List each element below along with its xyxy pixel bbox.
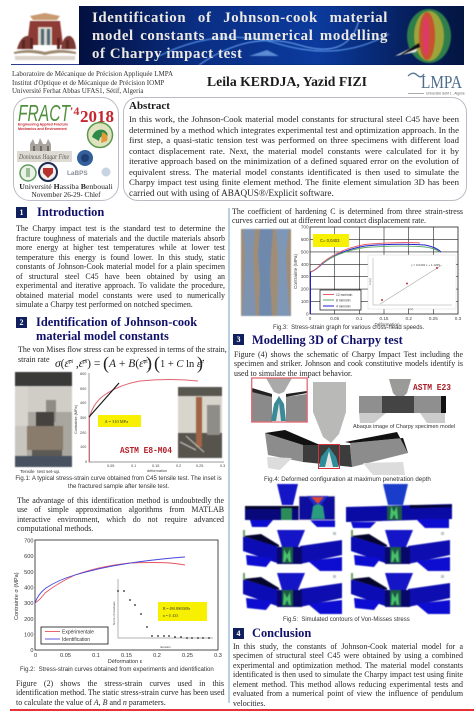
chart: strain rate curves: 0.15 — [380, 316, 389, 321]
photo label: Tensile test set-up. — [20, 469, 60, 474]
chart: strain rate curves: 100 — [301, 299, 309, 304]
chart: tensile stress-strain curve: 400 — [80, 401, 86, 405]
abstract text: In this work, the Johnson-Cook material model constants for structural steel C45 have been — [129, 114, 459, 124]
chart: experimental vs identification curves: 500 — [24, 570, 34, 576]
deformed right beam — [350, 438, 408, 467]
conference logo artwork: '4 — [70, 104, 79, 118]
chart: strain rate curves: 600 — [301, 237, 309, 242]
photo: fractured sample — [177, 386, 223, 459]
flow stress text — [18, 345, 227, 364]
figure: Charpy specimen model and deformed configuration — [251, 377, 455, 475]
figure 2 text: to calculate the value of A, B and n parameters. — [16, 698, 166, 707]
accent line under logo — [11, 64, 79, 65]
conference logo artwork — [17, 100, 114, 182]
yield value label — [98, 415, 141, 427]
regression inset — [368, 255, 456, 311]
affiliations: Institut d'Optique et de Mécanique de Précision IOMP — [12, 78, 164, 86]
striker — [313, 382, 346, 443]
abstract text: equivalent stress. The material model constants identificated is then used to simulate the — [129, 167, 459, 177]
chart: strain rate curves: Contrainte (MPa) — [293, 254, 298, 289]
introduction text: constants of Johnson-Cook material model for a plain specimen — [16, 262, 225, 271]
blue curve — [310, 244, 441, 314]
conference logo artwork: Mechanics and Environment — [18, 127, 68, 131]
chart: tensile stress-strain curve: 0.1 — [131, 464, 136, 468]
residual inset chart: Norm of residuals — [112, 601, 116, 625]
chart: strain rate curves: Déformation — [374, 322, 400, 327]
chart: strain rate curves: 0 — [309, 316, 312, 321]
conclusion text: element method. This method allows reducing experimental tests and — [233, 680, 463, 689]
modelling text: used to simulate the impact behavior. — [234, 369, 352, 378]
conference logo artwork: Engineering Applied Fracture — [18, 122, 68, 126]
introduction text: more energy at higher test temperatures while at lower test — [16, 243, 225, 252]
notch zone — [303, 445, 352, 467]
chart: strain rate curves — [293, 224, 462, 327]
affiliations — [12, 70, 173, 95]
chart: tensile stress-strain curve: 200 — [80, 431, 86, 435]
chart: tensile stress-strain curve: 0 — [85, 460, 87, 464]
panel: abstract — [123, 97, 467, 201]
chart: experimental vs identification curves: 400 — [24, 586, 34, 592]
zoomed notch inset — [252, 378, 307, 422]
chart: experimental vs identification curves: 0.2 — [153, 653, 161, 659]
standard label: ASTM E8-M04 — [120, 445, 172, 456]
chart: strain rate curves: 200 — [301, 286, 309, 292]
Johnson-Cook equation: ( — [103, 353, 109, 374]
figure 3 caption: Fig.3: Stress-strain graph for various cross-head speeds. — [273, 325, 424, 331]
chart: strain rate curves: 0.05 — [330, 316, 340, 321]
chart: experimental vs identification curves: 0.1 — [92, 653, 100, 659]
banner title text: Identification of Johnson-cook material — [92, 10, 388, 26]
modelling text: Figure (4) shows the schematic of Charpy Impact Test including the — [234, 350, 463, 358]
chart: strain rate curves: 0.3 — [455, 316, 462, 321]
chart: tensile stress-strain curve: 0.25 — [196, 464, 203, 468]
conference host text: Université Hassiba Benbouali — [19, 182, 113, 190]
conclusion text: In this study, the constants of Johnson-Cook material model for a — [233, 642, 463, 650]
advantage text: interactive environment, which do not require advanced — [17, 515, 224, 524]
chart: strain rate curves: 0.1 — [356, 316, 363, 321]
introduction text: fracture toughness of materials and the ductile materials absorb — [16, 234, 225, 243]
banner title text: of Charpy impact test — [92, 46, 243, 62]
chart legend: Identification — [62, 637, 90, 643]
conference logo artwork: Doninous Hagar Fine — [18, 153, 69, 161]
figure 1 caption: the fractured sample after tensile test. — [68, 484, 169, 490]
top-right specimen model — [359, 379, 446, 423]
red curve — [311, 242, 420, 272]
Johnson-Cook equation: σ(ε̄ — [55, 358, 69, 370]
section 1 number: 1 — [20, 208, 24, 217]
introduction text: temperature this energy is found lower. In this study, static — [16, 253, 225, 262]
conference host text: November 26-29- Chlef — [31, 191, 101, 199]
banner title text — [92, 10, 388, 62]
chart: tensile stress-strain curve: déformation — [147, 469, 167, 473]
authors: Leila KERDJA, Yazid FIZI — [207, 74, 367, 89]
advantage text: The advantage of this identification method is undoubtedly the — [17, 496, 224, 504]
advantage text: use of simple approximation algorithms from MATLAB — [17, 505, 224, 514]
abstract text — [129, 114, 459, 198]
bottom accent bar — [10, 708, 474, 711]
advantage text — [17, 496, 224, 533]
model caption: Abaqus image of Charpy specimen model — [353, 424, 455, 430]
figure 2 text — [16, 678, 225, 707]
conclusion text: velocities. — [233, 699, 265, 708]
Johnson-Cook equation: pl — [144, 360, 148, 365]
figure: Von-Mises stress contours — [242, 483, 453, 615]
standard label E23: ASTM E23 — [413, 383, 451, 393]
figure 1 caption — [15, 476, 222, 490]
experimental curve — [35, 562, 185, 603]
abstract text: carried out with using of ABAQUS®/Explicit software. — [129, 188, 334, 198]
section 2 number: 2 — [20, 318, 24, 327]
chart: experimental vs identification curves: 600 — [24, 554, 34, 560]
conference logo artwork: FRACT — [18, 100, 71, 126]
Johnson-Cook equation: ) — [197, 353, 203, 374]
affiliations: Laboratoire de Mécanique de Précision Appliquée LMPA — [12, 70, 173, 78]
residual inset chart: Iteration — [160, 645, 171, 649]
Johnson-Cook equation: 1 + C ln ε̇ — [160, 359, 201, 370]
modelling text — [234, 350, 463, 378]
chart legend: 12 mm/min — [336, 293, 352, 297]
university logo — [13, 12, 77, 60]
chart: tensile stress-strain curve: 600 — [80, 372, 86, 376]
chart: experimental vs identification curves: Contrainte σ (MPa) — [14, 572, 20, 620]
chart: strain rate curves: 500 — [301, 250, 309, 254]
Johnson-Cook equation: pl — [69, 360, 74, 365]
section 1 number — [16, 207, 27, 218]
chart: experimental vs identification curves — [14, 538, 222, 665]
Johnson-Cook equation: , — [73, 358, 79, 370]
chart: tensile stress-strain curve: 0.3 — [220, 464, 225, 468]
regression inset: ln(ε̇) — [408, 307, 413, 311]
figure 5 caption: Fig.5: Simulated contours of Von-Misses stress — [283, 617, 410, 623]
photo: tested specimens — [240, 228, 292, 317]
section 2 heading — [36, 314, 198, 343]
identified parameters label: B = 490.8965MPa — [163, 607, 191, 611]
section 2 heading: material model constants — [36, 329, 169, 343]
abstract text: first step, a quasi-static tension test was performed on three specimens with different load — [129, 135, 459, 145]
chart: strain rate curves: 0.25 — [429, 316, 438, 321]
affiliations: Université Ferhat Abbas UFAS1, Sétif, Algeria — [12, 87, 144, 95]
Johnson-Cook equation: ) — [148, 358, 152, 370]
conclusion text: evaluated from a numerical point of view the influence of pendulum — [233, 689, 463, 698]
chart: experimental vs identification curves: 0.05 — [60, 653, 71, 659]
deformed left beam — [265, 433, 303, 462]
section 3 number: 3 — [236, 335, 240, 344]
figure 2 text: Figure (2) shows the stress-strain curves used in this — [16, 678, 224, 688]
conclusion text: specimen of structural steel C45 were obtained by using a combined — [233, 651, 463, 660]
chart: experimental vs identification curves: 700 — [24, 538, 34, 544]
introduction text — [16, 224, 225, 309]
chart: experimental vs identification curves: 200 — [24, 617, 34, 623]
chart: experimental vs identification curves: 0.15 — [121, 653, 132, 659]
stress-strain curve — [90, 380, 198, 462]
chart: tensile stress-strain curve — [74, 372, 226, 473]
chart legend — [41, 627, 108, 644]
identified parameters label: n = 0. 433 — [163, 614, 178, 618]
chart: strain rate curves: 0 — [306, 312, 309, 316]
abstract text: contact displacement rate. Next, the material model constants were calculated for it by — [129, 146, 459, 156]
hardening value label: C= 0,0403 — [320, 238, 340, 243]
residual inset chart — [112, 579, 213, 649]
conference logo artwork: LaBPS — [67, 170, 88, 177]
chart: experimental vs identification curves: 0 — [30, 648, 34, 654]
chart: strain rate curves: 700 — [301, 224, 309, 230]
chart: experimental vs identification curves: 300 — [24, 601, 34, 607]
introduction text: The Charpy impact test is the standard test to determine the — [16, 224, 225, 233]
modelling text: specimen and striker. Johnson and cook constitutive models identify is — [234, 359, 463, 368]
green curve — [311, 246, 440, 272]
figure 2 text: identification method. The static stress-strain curve has been used — [16, 688, 225, 697]
chart: strain rate curves: 400 — [301, 262, 309, 267]
flow stress text: The von Mises flow stress can be expressed in terms of the strain, — [18, 345, 227, 354]
elastic tangent line — [89, 383, 119, 417]
panel: conference logo — [13, 97, 119, 201]
chart: tensile stress-strain curve: 100 — [80, 445, 86, 449]
conference logo artwork: 2018 — [80, 107, 114, 126]
chart: experimental vs identification curves: 0.25 — [182, 653, 193, 659]
contour panel 2 — [346, 484, 452, 528]
chart legend: 4 mm/min — [336, 304, 351, 308]
Johnson-Cook equation: pl — [83, 360, 88, 365]
introduction text: experimental and iterative approach. To validate the procedure, — [16, 281, 225, 290]
Johnson-Cook equation: ) — [146, 353, 152, 374]
chart legend — [320, 290, 361, 310]
section 3 heading: Modelling 3D of Charpy test — [252, 332, 403, 346]
Johnson-Cook equation — [55, 353, 204, 374]
hardening value label — [313, 234, 349, 247]
hardening text: The coefficient of hardening C is determined from three strain-stress — [232, 206, 463, 216]
chart: tensile stress-strain curve: 0.15 — [152, 464, 159, 468]
conference host text — [19, 182, 113, 199]
contour panel 5 — [243, 573, 342, 614]
yield value label: A = 310 MPa — [104, 419, 128, 424]
abstract text: iterative approach based on the minimization of a defined squared error on the evolution of — [129, 156, 459, 166]
LMPA logo: Université Sétif 1 , Algérie — [426, 92, 465, 96]
chart: tensile stress-strain curve: 0.05 — [107, 464, 114, 468]
abstract heading: Abstract — [129, 100, 170, 112]
zoom frame on deformed notch — [318, 444, 340, 469]
chart: strain rate curves: 0.2 — [406, 316, 412, 321]
chart legend: Expérimentale — [62, 630, 94, 636]
abstract text: determined by a method which integrates experimental test and optimization approach. In the — [129, 125, 459, 135]
section 2 heading: Identification of Johnson-cook — [36, 314, 197, 328]
hardening text: curves carried out at different load contact displacement rate. — [232, 216, 426, 225]
section 4 number: 4 — [236, 629, 240, 638]
chart legend: 8 mm/min — [336, 298, 351, 302]
abstract text: Charpy impact test using finite element method. The finite element simulation 3D has been — [129, 177, 459, 187]
advantage text: computational methods. — [17, 524, 93, 533]
contour panel 4 — [351, 530, 450, 571]
identification curve — [35, 557, 185, 603]
regression inset: Ln(σ) — [368, 278, 372, 285]
conclusion text — [233, 642, 463, 708]
section 4 heading: Conclusion — [252, 626, 311, 640]
flow stress text: strain rate — [18, 355, 50, 364]
Johnson-Cook equation: ( — [154, 353, 160, 374]
contour panel 3 — [243, 530, 342, 571]
section 4 number — [233, 628, 244, 639]
Johnson-Cook equation: ) = — [87, 358, 100, 370]
figure 4 caption: Fig.4: Deformed configuration at maximum penetration depth — [264, 476, 431, 483]
contour panel 6 — [351, 573, 450, 614]
chart: experimental vs identification curves: Déformation ε — [108, 659, 143, 665]
chart: strain rate curves: 300 — [301, 274, 309, 279]
LMPA logo — [408, 72, 465, 96]
figure 2 caption: Fig.2: Stress-strain curves obtained from experiments and identification — [20, 666, 214, 673]
Johnson-Cook equation: A + B(ε̄ — [109, 358, 144, 370]
chart: tensile stress-strain curve: 0.2 — [176, 464, 181, 468]
banner title text: model constants and numerical modelling — [92, 28, 388, 44]
title banner — [79, 6, 464, 65]
anvils — [267, 457, 405, 475]
introduction text: simulate a Charpy test performed on notched specimen. — [16, 300, 193, 309]
conclusion text: experimental and optimization method. The material model constants — [233, 661, 463, 670]
regression inset: y = 0.0403 x + 1.1299 — [411, 263, 440, 267]
identified parameters label — [158, 602, 207, 621]
section 2 number — [16, 317, 27, 328]
figure 1 caption: Fig.1: A typical stress-strain curve obtained from C45 tensile test. The inset is — [15, 476, 222, 482]
conclusion text: identificated is then used to simulate the Charpy impact test using finite — [233, 670, 463, 679]
column divider — [228, 208, 230, 703]
section 3 number — [233, 334, 244, 345]
hardening text — [232, 206, 463, 225]
chart: experimental vs identification curves: 0 — [34, 653, 37, 659]
contour panel 1 — [245, 484, 335, 527]
introduction text: obtained material model constants were used to numerically — [16, 291, 225, 300]
chart: tensile stress-strain curve: 500 — [80, 387, 86, 391]
chart: tensile stress-strain curve: Contrainte (MPa) — [74, 404, 78, 434]
Johnson-Cook equation: ε̄̇ — [79, 358, 87, 370]
photo: tensile test set-up — [14, 371, 73, 468]
introduction text: of structural steel C45 have been obtained by using an — [16, 272, 225, 281]
chart: tensile stress-strain curve: 300 — [80, 416, 86, 420]
section 1 heading: Introduction — [37, 204, 104, 218]
chart: experimental vs identification curves: 0.3 — [214, 653, 222, 659]
chart: experimental vs identification curves: 100 — [24, 632, 34, 638]
